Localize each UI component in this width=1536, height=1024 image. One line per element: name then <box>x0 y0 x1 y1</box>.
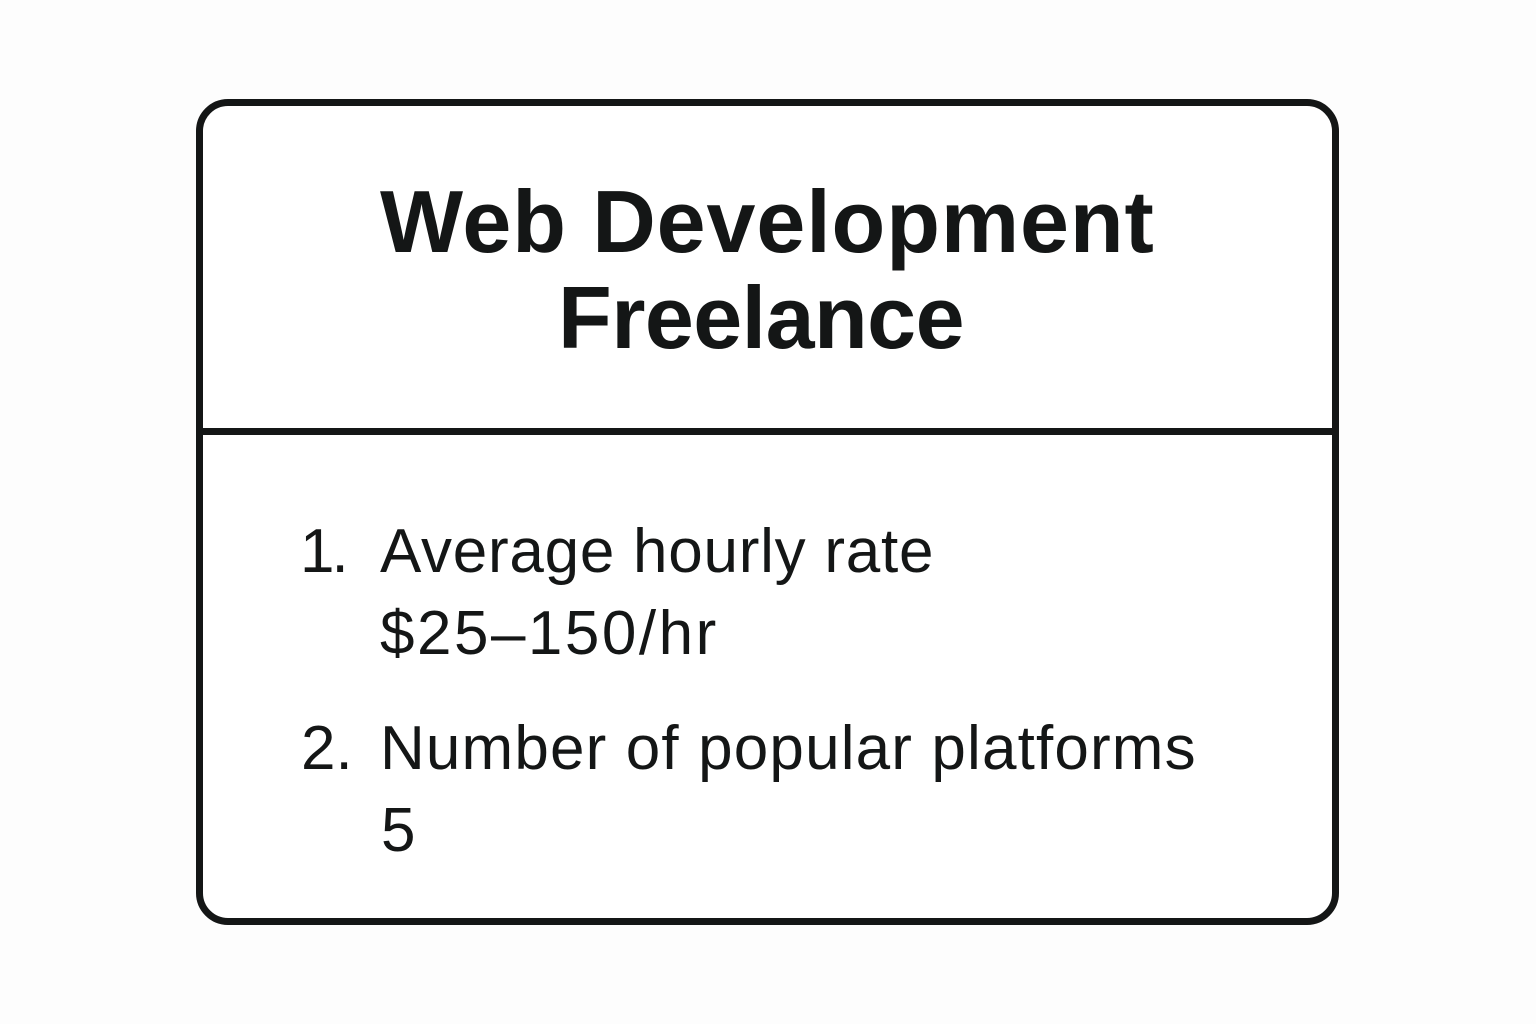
list item 1 label: Average hourly rate <box>380 517 934 586</box>
list number 2: 2. <box>301 714 353 783</box>
list item 1 value: $25–150/hr <box>380 599 719 668</box>
list number 1: 1. <box>300 517 346 586</box>
heading line 1: Web Development <box>380 172 1155 271</box>
panel: freelance card <box>196 99 1339 925</box>
list item 2 label: Number of popular platforms <box>380 714 1197 783</box>
divider between heading and list <box>200 428 1335 435</box>
heading line 2: Freelance <box>558 268 964 367</box>
list item 2 value: 5 <box>381 796 415 865</box>
